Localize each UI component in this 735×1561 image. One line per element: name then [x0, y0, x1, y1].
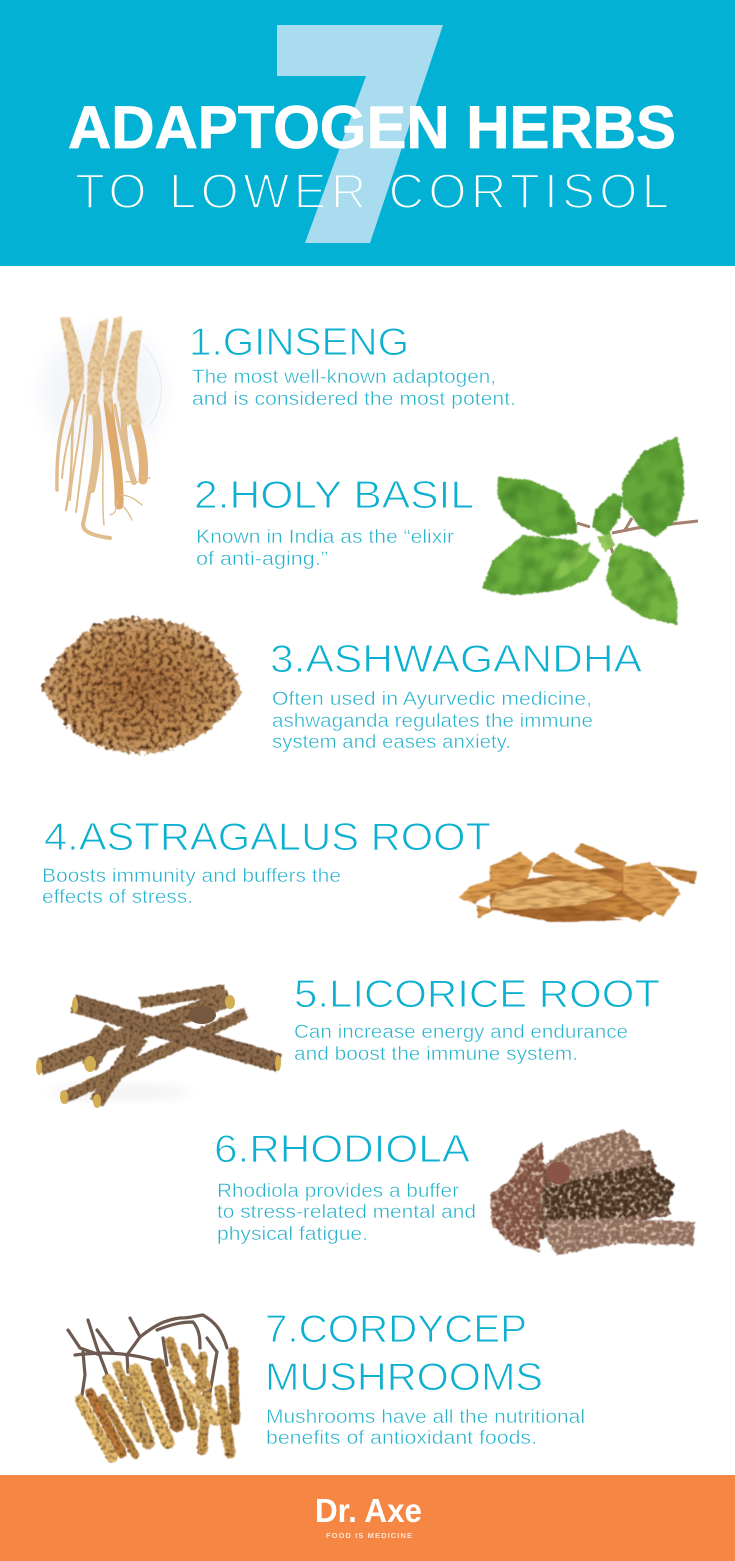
item 6: rhodiola	[214, 1128, 695, 1255]
item 5: licorice root	[36, 973, 660, 1108]
description: system and eases anxiety.	[272, 731, 511, 753]
icon: astragalus slices	[458, 843, 697, 922]
header title: adaptogen herbs: ADAPTOGEN HERBS	[68, 94, 676, 161]
description: Known in India as the “elixir	[196, 526, 455, 548]
description	[42, 865, 341, 908]
description: Rhodiola provides a buffer	[217, 1180, 460, 1202]
icon: basil leaves	[482, 437, 698, 625]
footer banner	[0, 1475, 735, 1561]
description: of anti-aging.”	[196, 548, 328, 570]
heading: MUSHROOMS	[265, 1356, 543, 1399]
description: Mushrooms have all the nutritional	[266, 1406, 585, 1428]
header subtitle: to lower cortisol: TO LOWER CORTISOL	[75, 165, 669, 219]
description: benefits of antioxidant foods.	[266, 1427, 537, 1449]
description: Can increase energy and endurance	[294, 1021, 628, 1043]
header banner	[0, 0, 735, 266]
heading: 4.ASTRAGALUS ROOT	[44, 816, 491, 859]
description	[266, 1406, 585, 1449]
heading: 6.RHODIOLA	[214, 1128, 470, 1171]
item 7: cordycep mushrooms	[68, 1308, 585, 1457]
icon: cordyceps	[68, 1315, 235, 1457]
tagline: FOOD IS MEDICINE	[326, 1531, 412, 1540]
description: effects of stress.	[42, 886, 193, 908]
icon: licorice sticks	[36, 990, 281, 1108]
big numeral 7	[277, 25, 443, 243]
icon: rhodiola roots	[490, 1130, 695, 1255]
icon: seed pile	[42, 618, 241, 753]
item 4: astragalus root	[42, 816, 697, 922]
description	[294, 1021, 628, 1065]
description: physical fatigue.	[217, 1223, 368, 1245]
heading: 7.CORDYCEP	[265, 1308, 527, 1351]
description: Boosts immunity and buffers the	[42, 865, 341, 887]
description: ashwaganda regulates the immune	[272, 710, 593, 732]
description: The most well-known adaptogen,	[192, 366, 496, 388]
heading: 3.ASHWAGANDHA	[270, 638, 642, 681]
description: Often used in Ayurvedic medicine,	[272, 688, 592, 710]
description	[217, 1180, 476, 1245]
description	[272, 688, 593, 753]
heading: 1.GINSENG	[189, 321, 409, 364]
heading: 2.HOLY BASIL	[194, 474, 474, 517]
heading: 5.LICORICE ROOT	[294, 973, 660, 1016]
description	[192, 366, 516, 410]
heading	[265, 1308, 543, 1399]
description: to stress-related mental and	[217, 1201, 476, 1223]
icon: ginseng roots on plate	[41, 316, 165, 538]
item 2: holy basil	[194, 437, 698, 625]
description: and boost the immune system.	[294, 1043, 578, 1065]
logo: Dr. Axe: Dr. Axe	[315, 1492, 422, 1529]
item 3: ashwagandha	[42, 618, 642, 753]
item 1: ginseng	[41, 316, 516, 538]
description	[196, 526, 455, 570]
description: and is considered the most potent.	[192, 388, 516, 410]
